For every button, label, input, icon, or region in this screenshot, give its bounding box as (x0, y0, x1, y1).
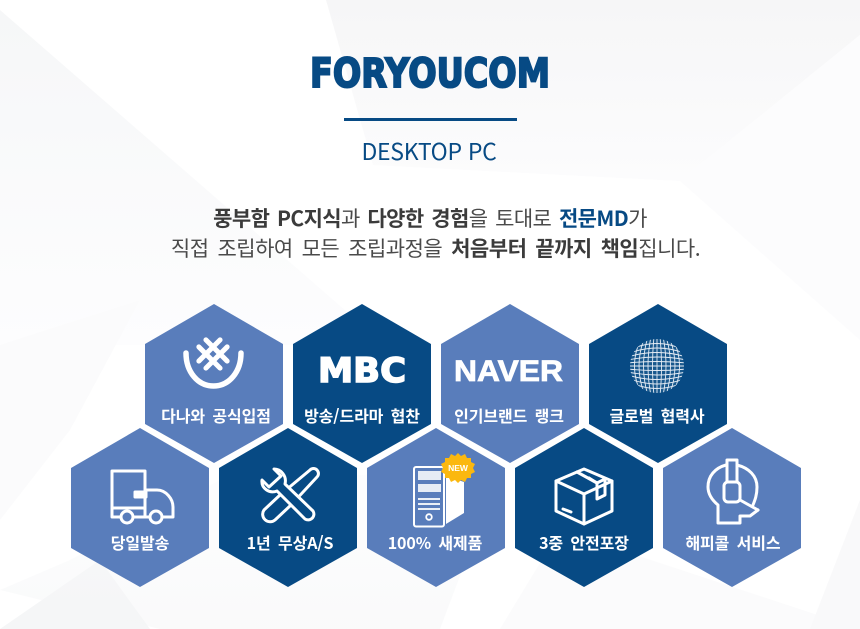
label: 해피콜 서비스 (685, 530, 781, 554)
icon: PC tower (414, 467, 464, 526)
icon: globe (629, 338, 685, 394)
icon: headset head (708, 460, 758, 523)
hex: Danawa official store (145, 304, 283, 463)
label: 글로벌 협력사 (609, 403, 705, 427)
icon: box (556, 469, 612, 524)
hexagon grid (71, 304, 801, 587)
icon: tools (262, 469, 318, 522)
label: 3중 안전포장 (539, 530, 629, 554)
badge: NEW (441, 453, 475, 483)
subtitle: DESKTOP PC: DESKTOP PC (362, 133, 496, 167)
hex: same-day shipping (71, 428, 209, 587)
label: 방송/드라마 협찬 (304, 403, 420, 427)
hex: happy call service (663, 428, 801, 587)
label: 1년 무상A/S (247, 530, 333, 554)
divider rule (344, 118, 517, 121)
icon: truck (112, 471, 173, 523)
label: 인기브랜드 랭크 (454, 403, 564, 427)
hex: 1-year AS (219, 428, 357, 587)
intro text line 1: 풍부함 PC지식과 다양한 경험을 토대로 전문MD가 (213, 203, 647, 233)
badge: NEW: NEW (448, 463, 469, 473)
hex: global partners (589, 304, 727, 463)
hex: MBC (293, 304, 431, 463)
hex: safe packaging (515, 428, 653, 587)
icon: Danawa mark (186, 333, 241, 386)
logo: NAVER: NAVER (454, 355, 563, 388)
label: 100% 새제품 (388, 530, 483, 554)
hex: Naver (441, 304, 579, 463)
logo: FORYOUCOM: FORYOUCOM (310, 51, 550, 97)
label: 당일발송 (111, 530, 170, 554)
label: 다나와 공식입점 (161, 403, 271, 427)
intro text line 2: 직접 조립하여 모든 조립과정을 처음부터 끝까지 책임집니다. (171, 233, 700, 263)
hex: new product (367, 428, 505, 587)
logo: MBC: MBC (318, 351, 406, 391)
